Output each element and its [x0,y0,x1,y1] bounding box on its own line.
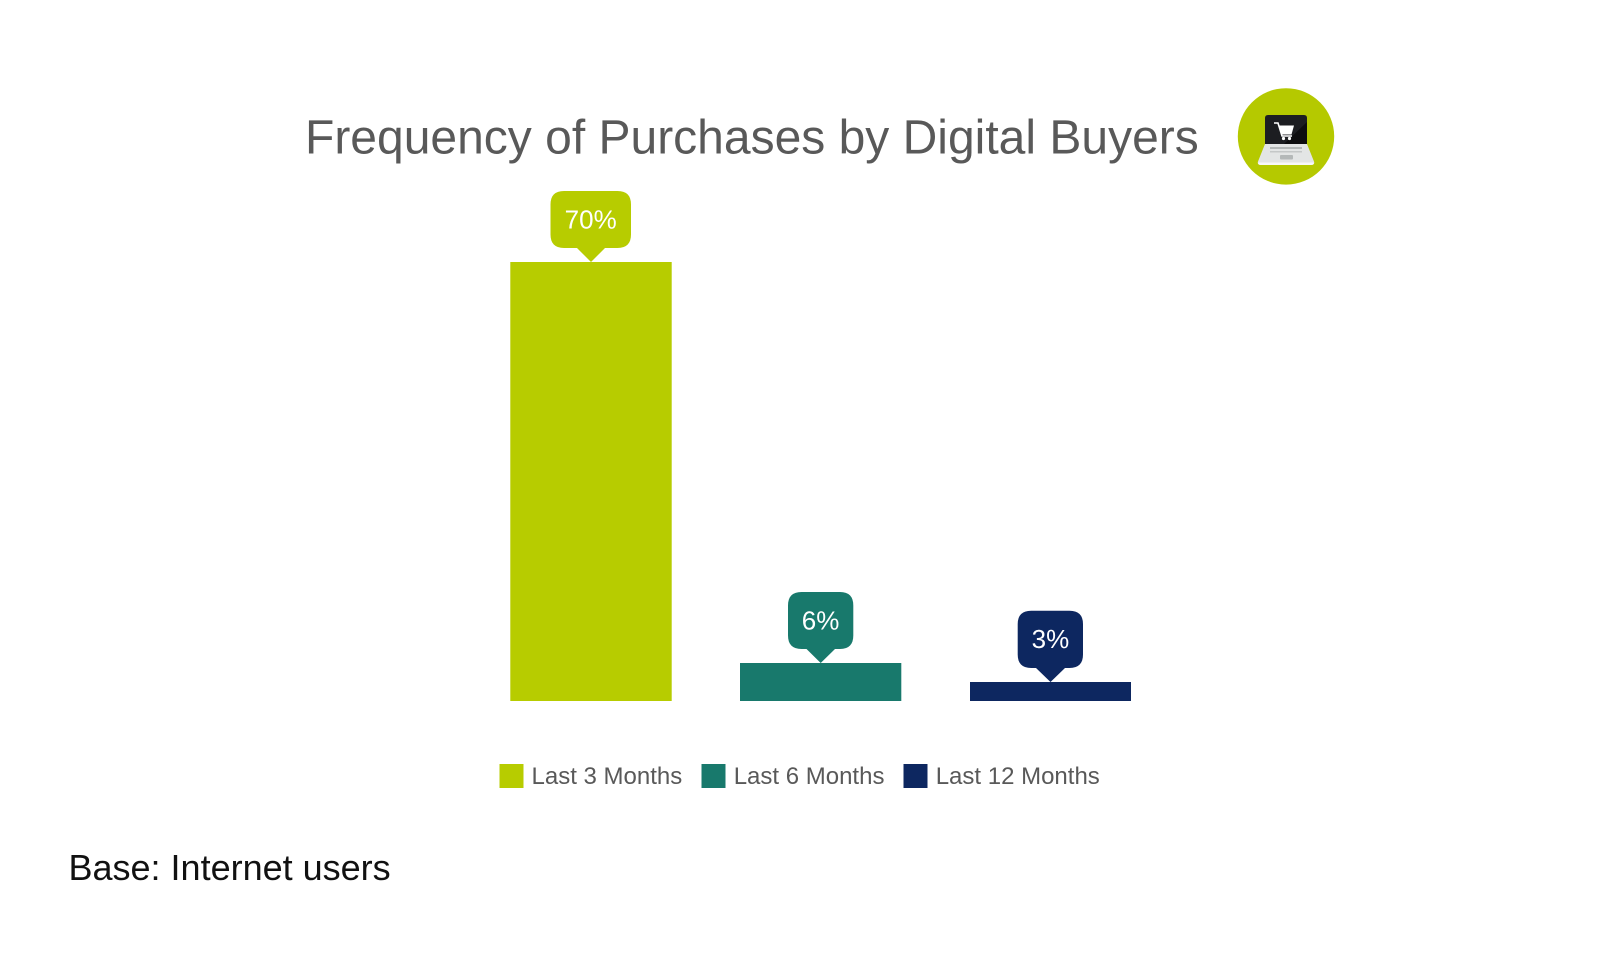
callout: 6%: 6% [802,606,839,636]
title: Frequency of Purchases by Digital Buyers [305,112,1199,164]
icon: laptop with shopping cart [1238,88,1334,185]
callout: 3%: 3% [1032,624,1069,654]
bar: Last 6 Months 6% [740,663,901,701]
bar: Last 3 Months 70% [510,262,672,701]
bar: Last 12 Months 3% [970,682,1131,701]
legend [500,763,1100,790]
base note: Base: Internet users [68,847,391,888]
legend item: Last 12 Months: Last 12 Months [936,763,1100,790]
legend item: Last 6 Months: Last 6 Months [734,763,884,790]
callout: 70%: 70% [565,204,617,234]
callout: 70% [550,191,631,262]
callout: 3% [1018,611,1083,682]
callout: 6% [788,592,853,663]
legend item: Last 3 Months: Last 3 Months [532,763,682,790]
